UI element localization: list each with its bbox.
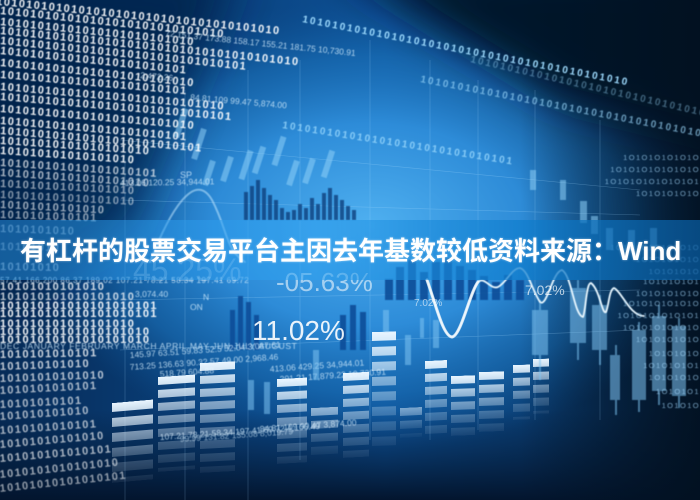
chart: left binary data column: 1010101010101 <box>0 380 98 397</box>
chart: left binary data column: 10101010101010101010 <box>0 334 150 346</box>
chart: left binary data column: 101010101010101010 <box>0 189 136 208</box>
chart: left binary data column: 1010101010101010101010101010101010101010 <box>0 25 300 68</box>
chart: left binary data column: 10101010101010101010101010 <box>0 57 195 89</box>
chart: right binary field: 1O1O1O1O1O <box>636 255 700 264</box>
chart: small numeric data rows: 84.81 109 99.47 3,874.00 <box>259 417 357 434</box>
chart: small numeric data rows: 301.21 17,879.22 10,730.91 <box>279 367 387 384</box>
chart: small numeric data rows: 3,074.40 <box>135 289 168 299</box>
chart: left binary data column: 1010101010101010101010101 <box>0 115 188 143</box>
chart: right binary field: 1O1O1O1O1O <box>636 335 700 344</box>
chart: left binary data column <box>0 0 300 495</box>
chart: left binary data column: 10101010101010101010101010 <box>0 16 195 48</box>
chart: left binary data column: 10101010101010 <box>0 369 105 385</box>
chart: small numeric data rows: 145.97 63.51 59.83 52.5 52.04 3,087.61 <box>129 339 281 360</box>
chart: left binary data column: 1010101010101 <box>0 418 98 437</box>
chart: left binary data column: 101010101010101010 <box>0 291 135 303</box>
chart: right binary field <box>605 153 700 410</box>
chart: left binary data column: 101010101010101010 <box>0 178 136 197</box>
text: percentage labels: -05.63% <box>276 267 373 297</box>
chart: left binary data column: 1010101010101010101010101 <box>0 45 188 77</box>
text: percentage labels: 45.25% <box>133 252 242 288</box>
chart: small numeric data rows: 518.79 604.88 <box>159 365 215 379</box>
chart: right binary field: 1O1O1O1O1O1O1 <box>618 311 700 320</box>
chart: right binary field: 1O1O1O1O1O1O1O1 <box>605 177 700 186</box>
chart: left binary data column: 1010101010101010101010101010101 <box>0 91 233 123</box>
chart: left binary data column: 1010101010101 <box>0 209 98 224</box>
chart: left binary data column: 101010101010101010101010101 <box>0 125 203 155</box>
chart: right binary field: 1O1O1O1O1 <box>643 277 700 286</box>
text: percentage labels <box>133 252 565 346</box>
chart: white trend line <box>150 190 644 337</box>
chart: white stacked bars <box>112 331 549 483</box>
chart: small numeric data rows: ON <box>190 302 203 312</box>
chart: small numeric data rows <box>0 28 387 444</box>
chart: right binary field: 1O1O1O1 <box>656 387 700 396</box>
chart: left binary data column: 10101010 <box>0 261 60 274</box>
chart: left binary data column: 101010101010101 <box>0 443 113 465</box>
chart: small numeric data rows: 99.99 131.82 135.08 8,019.79 <box>179 426 294 444</box>
title: 有杠杆的股票交易平台主因去年基数较低资料来源：Wind <box>20 236 681 266</box>
chart: right binary field: 1O1O1O <box>662 401 700 410</box>
chart: left binary data column: 10101010101010 <box>0 281 105 293</box>
chart: left binary data column: 101010101010101010101 <box>0 300 158 312</box>
chart: small numeric data rows: 107.21 78.21 58.34 197.41 69.72 4,106.49 <box>159 421 321 442</box>
chart: right binary field: 1O1O1O1O <box>649 349 700 358</box>
chart: left binary data column: 10101010101010101010 <box>0 326 150 338</box>
chart: right binary field: 1O1O1O1O1O1O <box>623 153 700 162</box>
chart: upper right binary streaks: 1010101010101010101010101010101 <box>282 120 515 168</box>
chart: upper histogram <box>244 180 356 220</box>
chart: right binary field: 1O1O1O1O1O <box>636 189 700 198</box>
chart: middle histogram <box>230 258 524 350</box>
chart: small numeric data rows: 713.25 136.63 90.32 57.49.00 2,968.46 <box>129 352 279 372</box>
chart: left binary data column: 10101010101010 <box>0 199 106 217</box>
text: percentage labels: 11.02% <box>252 315 345 346</box>
chart: left binary data column: 1010101010101010101010101 <box>0 69 188 97</box>
chart: left binary data column: 101010101010101010 <box>0 145 136 166</box>
chart: right binary field: 1O1O1O1O1 <box>643 361 700 370</box>
chart: right binary field: 1O1O1O1O <box>649 373 700 382</box>
chart: small numeric data rows: N <box>203 292 209 302</box>
chart: left binary data column: 10101010101010101010 <box>0 135 151 157</box>
chart: left binary data column: 1010101010101 <box>0 347 98 361</box>
chart: right binary field: 1O1O1O1O1O1O <box>623 299 700 308</box>
chart: left binary data column: 10101010101010101 <box>0 470 127 495</box>
chart: left binary data column: 101010101010101010101010101010101 <box>0 35 248 73</box>
chart: right binary field: 1O1O1O1O1O <box>636 289 700 298</box>
text: percentage labels: 7.02% <box>525 282 565 298</box>
chart: left binary data column: 101010101010101010101010101010 <box>0 5 225 41</box>
chart: small numeric data rows: 413.06 429.25 34,944.01 <box>269 357 365 374</box>
chart: small numeric data rows: 57.41 166.200 86.37 189.02 107.21 78.21 58.34 197.41 69.72 <box>0 276 249 285</box>
chart: left binary data column: 1010101010 <box>0 223 75 238</box>
chart: left binary data column: 1010101010101010 <box>0 456 120 481</box>
chart: left binary data column: 10101010101 <box>0 395 83 411</box>
text: percentage labels: 7.02% <box>414 298 442 309</box>
chart: left binary data column: 101010101010101010 <box>0 318 135 330</box>
chart: right binary field: 1O1O1O1O1O1O1O <box>610 243 700 252</box>
title banner <box>0 220 700 280</box>
chart: left binary data column: 101010101010101010101 <box>0 157 158 180</box>
chart: upper right binary streaks: 10101010101010101010101010101010101010101010 <box>301 14 630 88</box>
chart: left binary data column: 10101010 <box>0 241 60 254</box>
chart: left binary data column: 101010101010 <box>0 358 90 373</box>
chart: lower candlesticks <box>248 280 686 415</box>
chart: left binary data column: 10101010101010101010101010 <box>0 103 196 132</box>
chart: small numeric data rows: 84.81 109 99.47 5,874.00 <box>190 92 287 110</box>
chart: small numeric data rows: 2,472.26 <box>140 70 174 83</box>
chart: left binary data column: 101010101010 <box>0 405 90 423</box>
chart: left binary data column: 10101010101010101010 <box>0 167 151 189</box>
chart: left binary data column: 10101010101010 <box>0 430 105 451</box>
chart: right binary field: 1O1O1O1O1O1O1O <box>610 165 700 174</box>
chart: candlesticks upper field <box>174 108 657 250</box>
chart: right binary field: 1O1O1O1O1O1O <box>623 323 700 332</box>
chart: small numeric data rows: DEC JANUARY FEBRUARY MARCH APRIL MAY JUN JULY AUGUST <box>0 341 297 351</box>
chart: small numeric data rows: 72 151.37 173.88 158.17 155.21 181.75 10,730.91 <box>165 28 356 58</box>
chart: upper right binary streaks <box>282 14 700 168</box>
chart: small numeric data rows: 413.06 120.25 34,944.01 <box>120 176 215 188</box>
chart: small numeric data rows: SP <box>180 170 192 180</box>
chart: right binary field: 1O1O1O1O <box>649 267 700 276</box>
chart: left binary data column: 101010101010101010101010101010 <box>0 81 225 113</box>
chart: left binary data column: 101010101010101010101 <box>0 308 158 320</box>
